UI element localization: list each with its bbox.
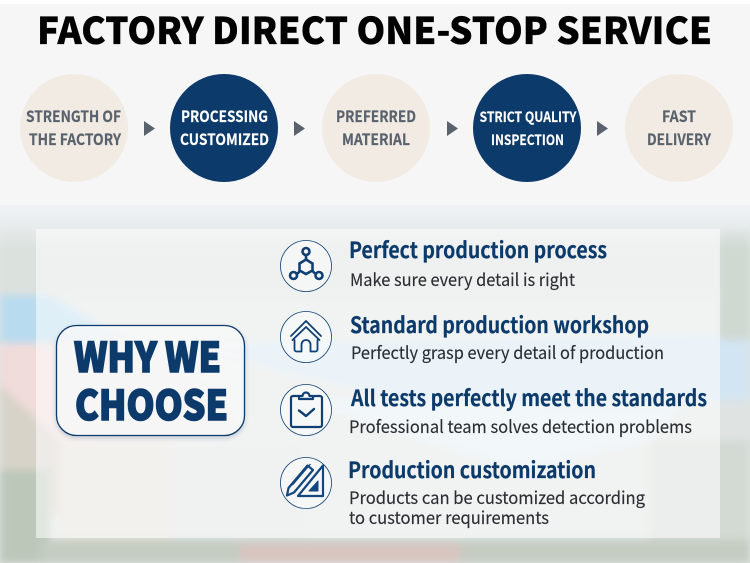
description: Make sure every detail is right xyxy=(350,266,576,291)
description: Perfectly grasp every detail of production xyxy=(351,339,664,364)
step: strict quality inspection: STRICT QUALITY xyxy=(480,107,577,127)
step: fast delivery: DELIVERY xyxy=(647,128,712,150)
title: FACTORY DIRECT ONE-STOP SERVICE xyxy=(37,1,712,55)
badge: why we choose: CHOOSE xyxy=(75,372,228,432)
step: strength of the factory xyxy=(20,74,128,182)
feature: standard production workshop xyxy=(280,308,664,364)
step: fast delivery: FAST xyxy=(662,105,696,127)
process flow xyxy=(20,74,733,182)
top section background xyxy=(0,4,750,205)
badge: why we choose: WHY WE xyxy=(74,324,221,384)
step: processing customized xyxy=(170,74,278,182)
step: strength of the factory: STRENGTH OF xyxy=(26,105,121,127)
faded factory aerial background xyxy=(0,205,750,563)
step: strict quality inspection xyxy=(473,74,581,182)
arrow 2 xyxy=(294,121,305,136)
icon: pencil and set square xyxy=(280,458,332,508)
description: Products can be customized according xyxy=(349,484,645,509)
arrow 4 xyxy=(597,121,608,136)
icon: house xyxy=(280,312,332,362)
step: preferred material: PREFERRED xyxy=(336,105,416,127)
translucent content panel xyxy=(36,229,720,538)
feature: perfect production process xyxy=(280,233,607,292)
step: processing customized: PROCESSING xyxy=(181,105,268,127)
badge: why we choose xyxy=(56,324,244,436)
heading: Standard production workshop xyxy=(350,308,649,340)
step: strength of the factory: THE FACTORY xyxy=(29,128,122,150)
icon: clipboard check xyxy=(280,384,332,436)
feature: production customization xyxy=(280,453,645,529)
arrow 1 xyxy=(144,121,155,136)
heading: Perfect production process xyxy=(349,233,607,265)
description: to customer requirements xyxy=(349,504,549,529)
step: fast delivery xyxy=(625,74,733,182)
heading: All tests perfectly meet the standards xyxy=(350,381,707,413)
icon: connected nodes xyxy=(280,240,332,292)
description: Professional team solves detection problems xyxy=(349,413,692,438)
step: processing customized: CUSTOMIZED xyxy=(180,128,269,150)
step: preferred material xyxy=(322,74,430,182)
step: strict quality inspection: INSPECTION xyxy=(491,130,564,150)
step: preferred material: MATERIAL xyxy=(342,128,410,150)
heading: Production customization xyxy=(348,453,596,485)
feature: all tests meet the standards xyxy=(280,381,707,438)
arrow 3 xyxy=(447,121,458,136)
